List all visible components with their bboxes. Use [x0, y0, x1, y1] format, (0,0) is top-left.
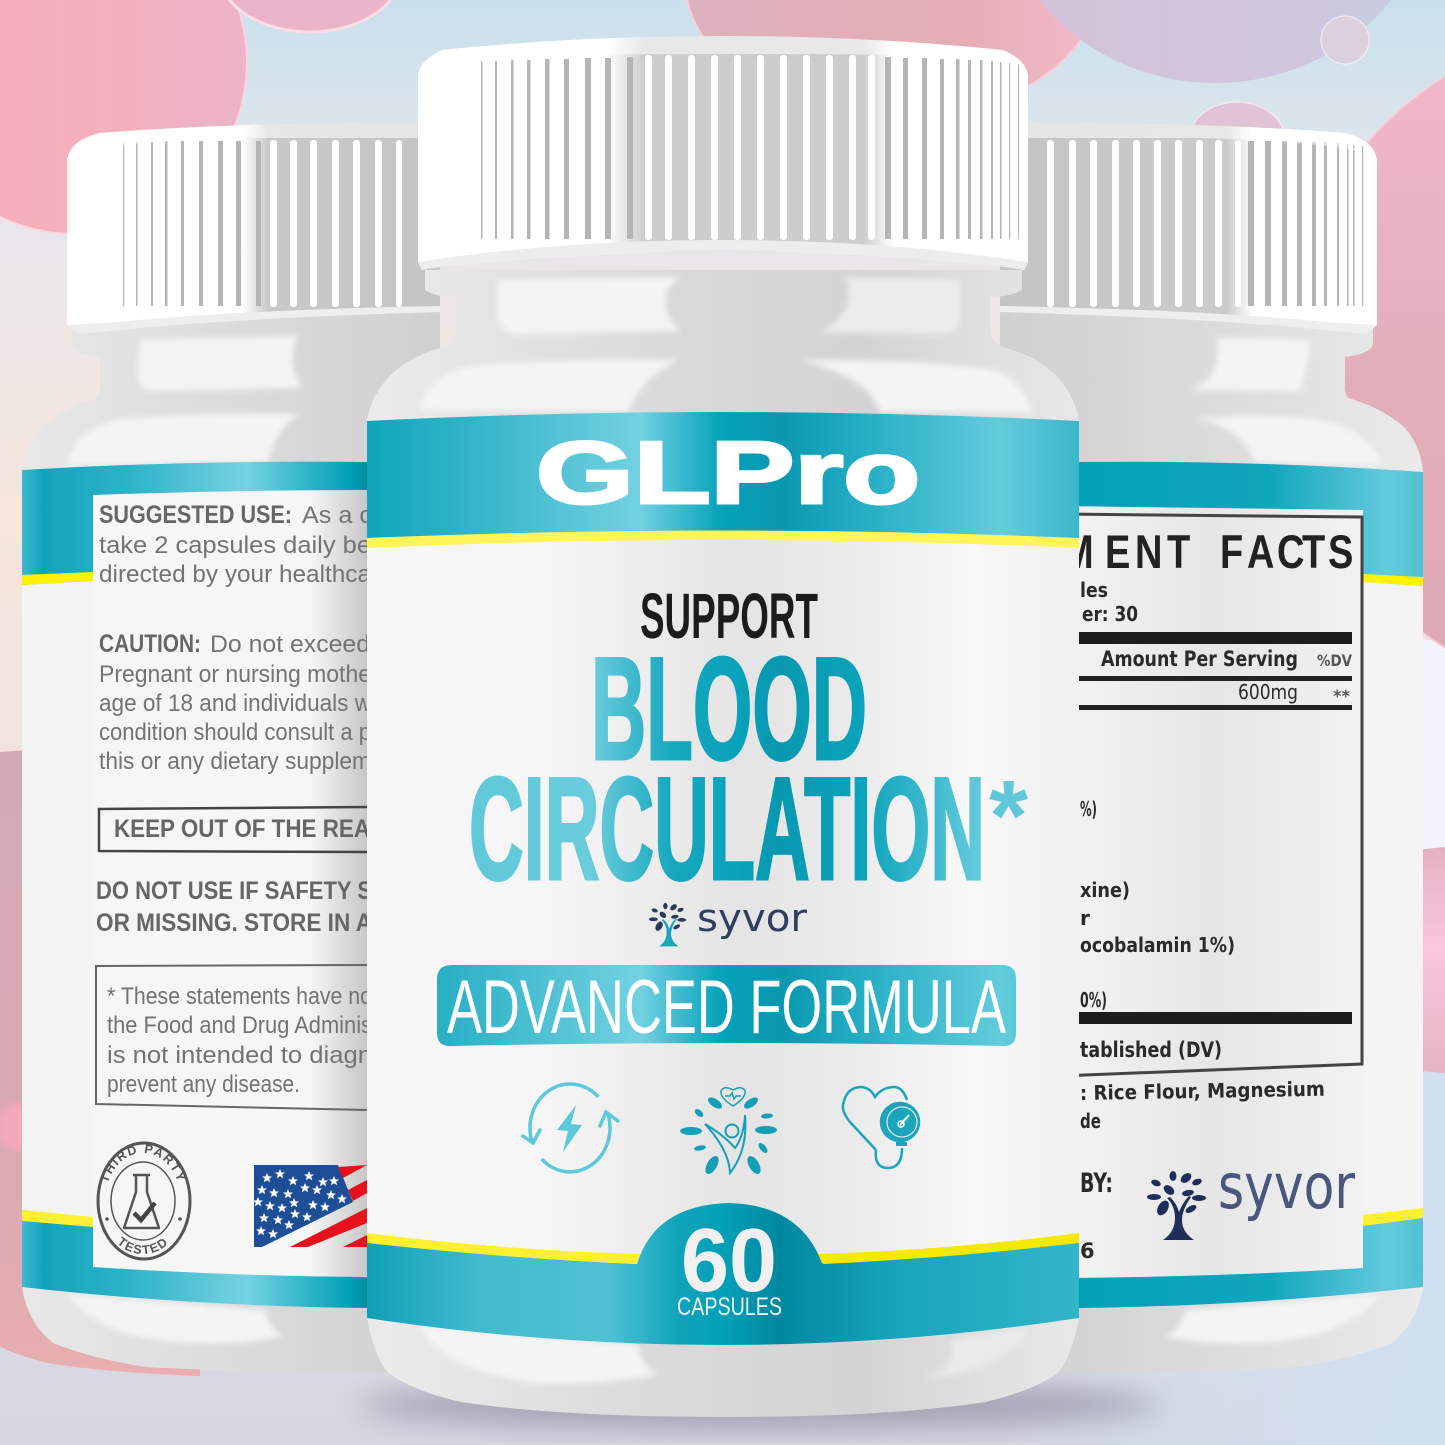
supplement facts table: ocobalamin 1%) [1080, 933, 1235, 957]
bottom teal band [367, 1203, 1079, 1345]
brand name GLPro: GLPro [536, 423, 920, 522]
heading BLOOD: BLOOD [591, 627, 867, 790]
left label text: this or any dietary supplem [99, 748, 371, 775]
supplement facts table: 0%) [1080, 988, 1107, 1012]
center bottle [367, 36, 1079, 1417]
heading SUPPORT: SUPPORT [640, 580, 818, 652]
FDA statement box: prevent any disease. [107, 1071, 300, 1098]
right bottle cap [1000, 122, 1377, 334]
do not use warning: OR MISSING. STORE IN A [96, 909, 372, 937]
left label text: Do not exceed [210, 631, 370, 658]
syvor logo small [649, 896, 807, 946]
supplement facts table: ** [1333, 687, 1350, 707]
FDA statement box [96, 965, 372, 1110]
heading CIRCULATION: CIRCULATION [469, 747, 985, 910]
FDA statement box: * These statements have no [107, 983, 372, 1010]
left label text: SUGGESTED USE: [99, 501, 292, 529]
supplement facts table: er: 30 [1082, 602, 1138, 626]
other ingredients text: BY: [1080, 1168, 1113, 1199]
other ingredients text: de [1080, 1109, 1101, 1133]
icon: heart with blood pressure gauge [843, 1087, 919, 1168]
supplement facts table: %DV [1317, 651, 1353, 670]
left label text: take 2 capsules daily be [99, 532, 371, 559]
third party tested seal [96, 1142, 192, 1260]
left label text: As a c [302, 502, 372, 529]
right label teal band and panel [1079, 462, 1423, 1308]
left bottle highlights [68, 336, 302, 1343]
other ingredients text [1080, 1077, 1325, 1263]
other ingredients text: : Rice Flour, Magnesium [1080, 1077, 1325, 1105]
center bottle cast shadow [360, 1381, 1160, 1429]
right bottle highlights [1165, 338, 1382, 1343]
center cap [418, 36, 1028, 270]
left bottle (back label: use and caution) [22, 122, 440, 1373]
supplement facts table: xine) [1080, 878, 1130, 902]
do not use warning [96, 877, 372, 937]
syvor logo small: syvor [697, 896, 807, 940]
FDA statement box: is not intended to diagn [107, 1042, 372, 1069]
bottom yellow stripes [367, 1233, 1079, 1264]
capsule count: 60 [681, 1211, 777, 1311]
advanced formula badge [437, 965, 1016, 1050]
keep out of reach box: KEEP OUT OF THE REA [114, 815, 370, 843]
advanced formula badge: ADVANCED FORMULA [447, 965, 1006, 1050]
left label text: condition should consult a p [99, 719, 371, 746]
left bottle cap [67, 122, 440, 334]
third party tested seal: THIRD PARTY [100, 1144, 185, 1181]
heading asterisk: * [989, 760, 1028, 872]
left bottle body [22, 305, 440, 1373]
top teal band [367, 412, 1079, 540]
supplement facts table [1060, 514, 1362, 1076]
supplement facts table: tablished (DV) [1080, 1038, 1222, 1062]
left label teal band and panel [22, 462, 367, 1308]
usa flag [253, 1165, 367, 1247]
left label text: directed by your healthca [99, 561, 372, 588]
center bottle highlights [420, 277, 1032, 1383]
icon: energy cycle [523, 1084, 618, 1172]
supplement facts table: les [1080, 578, 1108, 602]
left label text: CAUTION: [99, 630, 201, 658]
do not use warning: DO NOT USE IF SAFETY S [96, 877, 372, 905]
syvor logo large: syvor [1218, 1150, 1355, 1223]
supplement facts table: %) [1080, 797, 1097, 821]
other ingredients text: 6 [1080, 1239, 1095, 1263]
supplement facts table: r [1080, 906, 1090, 930]
center label white area [367, 412, 1079, 1345]
supplement facts table: 600mg [1238, 680, 1298, 704]
right bottle body [1000, 305, 1423, 1373]
FDA statement box: the Food and Drug Adminis [107, 1012, 372, 1039]
icon: wellness figure with leaves [680, 1088, 777, 1176]
supplement facts table: MENTFACTS [1062, 526, 1353, 579]
third party tested seal: TESTED [119, 1236, 166, 1254]
supplement facts table: Amount Per Serving [1101, 647, 1298, 671]
center bottle body [367, 270, 1079, 1417]
syvor logo large [1147, 1150, 1355, 1240]
right bottle (back label: supplement facts) [1000, 122, 1423, 1373]
left label text [99, 501, 372, 775]
keep out of reach box [99, 807, 370, 852]
top yellow stripe [367, 530, 1079, 548]
capsule count: CAPSULES [677, 1293, 782, 1321]
left label text: Pregnant or nursing mothe [99, 661, 371, 688]
left label text: age of 18 and individuals w [99, 690, 372, 717]
